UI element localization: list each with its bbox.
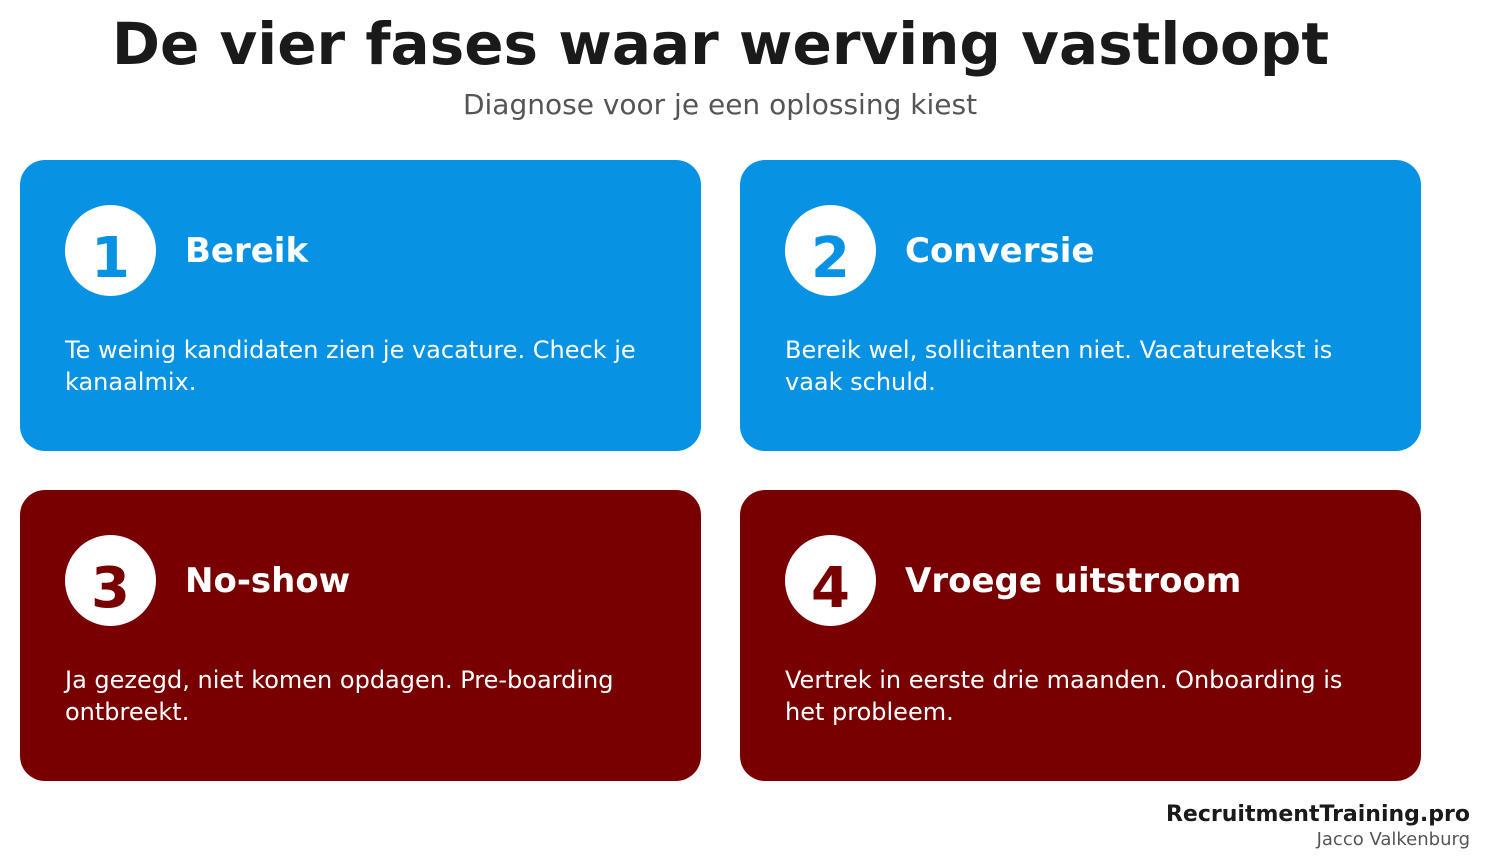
panel: 3 No-show: Ja gezegd, niet komen opdagen. Pre-boarding	[63, 666, 613, 694]
panel: 4 Vroege uitstroom: het probleem.	[785, 698, 954, 726]
panel: 1 Bereik: 1	[91, 226, 130, 291]
panel: 4 Vroege uitstroom	[740, 490, 1421, 781]
footer: author: Jacco Valkenburg	[1316, 829, 1470, 850]
panel: 3 No-show: 3	[91, 556, 130, 621]
panel: 1 Bereik	[20, 160, 701, 451]
panel: 3 No-show: ontbreekt.	[65, 698, 189, 726]
panel: 2 Conversie: Bereik wel, sollicitanten niet. Vacaturetekst is	[785, 336, 1332, 364]
panel: 2 Conversie: 2	[811, 226, 850, 291]
panel: 4 Vroege uitstroom: Vroege uitstroom	[905, 561, 1241, 601]
panel: 1 Bereik: Te weinig kandidaten zien je vacature. Check je	[64, 336, 636, 364]
panel: 2 Conversie: vaak schuld.	[785, 368, 936, 396]
panel: 2 Conversie	[740, 160, 1421, 451]
panel: 1 Bereik: kanaalmix.	[65, 368, 196, 396]
panel: 3 No-show: No-show	[185, 561, 350, 601]
panel: 3 No-show	[20, 490, 701, 781]
panel: 4 Vroege uitstroom: Vertrek in eerste drie maanden. Onboarding is	[785, 666, 1342, 694]
title: De vier fases waar werving vastloopt	[112, 10, 1329, 78]
panel: 2 Conversie: Conversie	[905, 231, 1094, 271]
panel: 1 Bereik: Bereik	[185, 231, 309, 271]
subtitle: Diagnose voor je een oplossing kiest	[463, 88, 977, 121]
panel: 4 Vroege uitstroom: 4	[811, 556, 850, 621]
footer: brand: RecruitmentTraining.pro	[1166, 802, 1470, 827]
